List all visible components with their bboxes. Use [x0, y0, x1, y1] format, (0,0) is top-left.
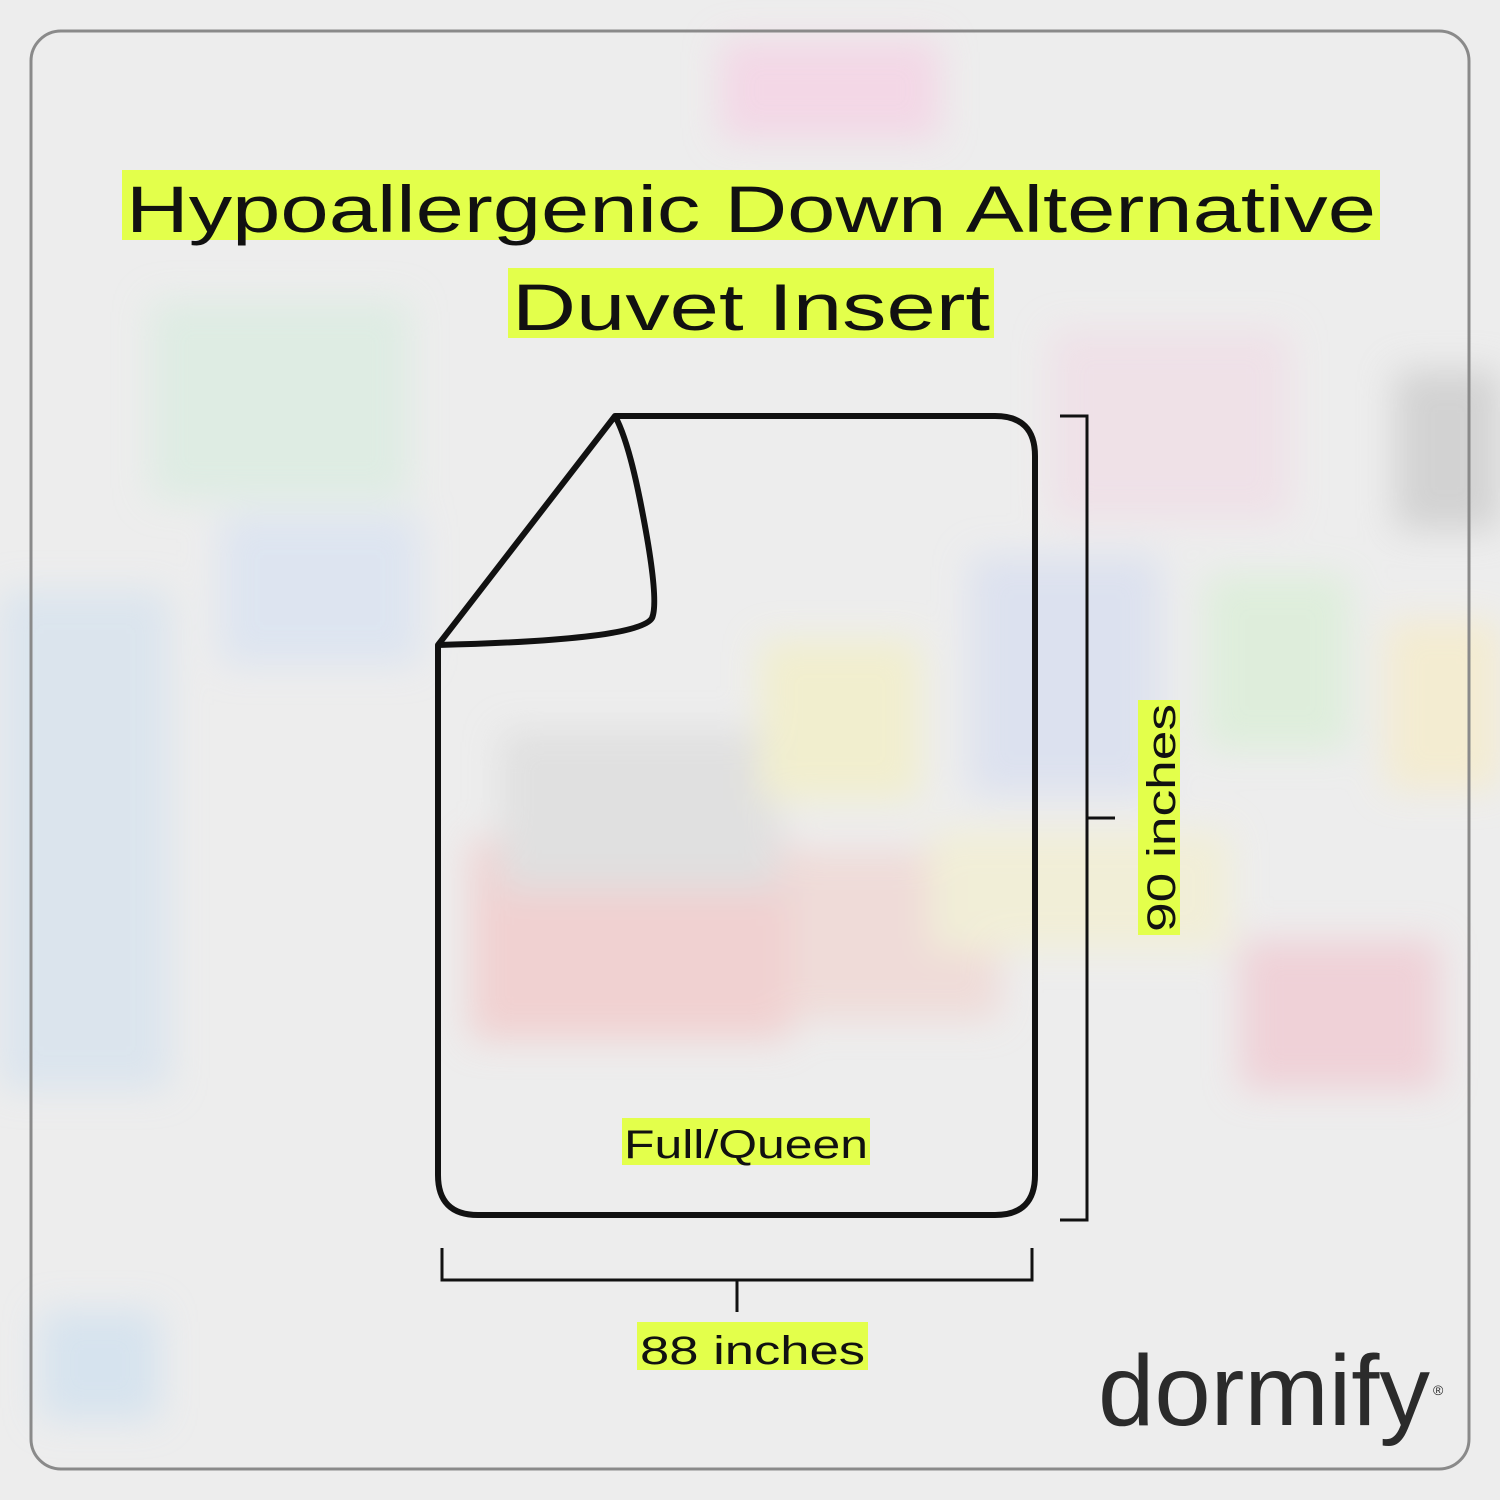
title: Hypoallergenic Down Alternative [126, 172, 1376, 246]
title: Duvet Insert [512, 270, 990, 344]
label: 90 inches [1138, 700, 1184, 935]
duvet outline diagram [438, 416, 1035, 1215]
logo: dormify: ® [1433, 1382, 1444, 1398]
title [122, 170, 1380, 344]
logo: dormify: dormify [1098, 1335, 1430, 1447]
label: 90 inches: 90 inches [1140, 704, 1184, 932]
dimension bracket: height [1060, 416, 1115, 1220]
label: 88 inches [637, 1322, 868, 1373]
label: 88 inches: 88 inches [640, 1329, 865, 1373]
dimension bracket: width [442, 1248, 1032, 1312]
label: Full/Queen: Full/Queen [624, 1123, 868, 1167]
